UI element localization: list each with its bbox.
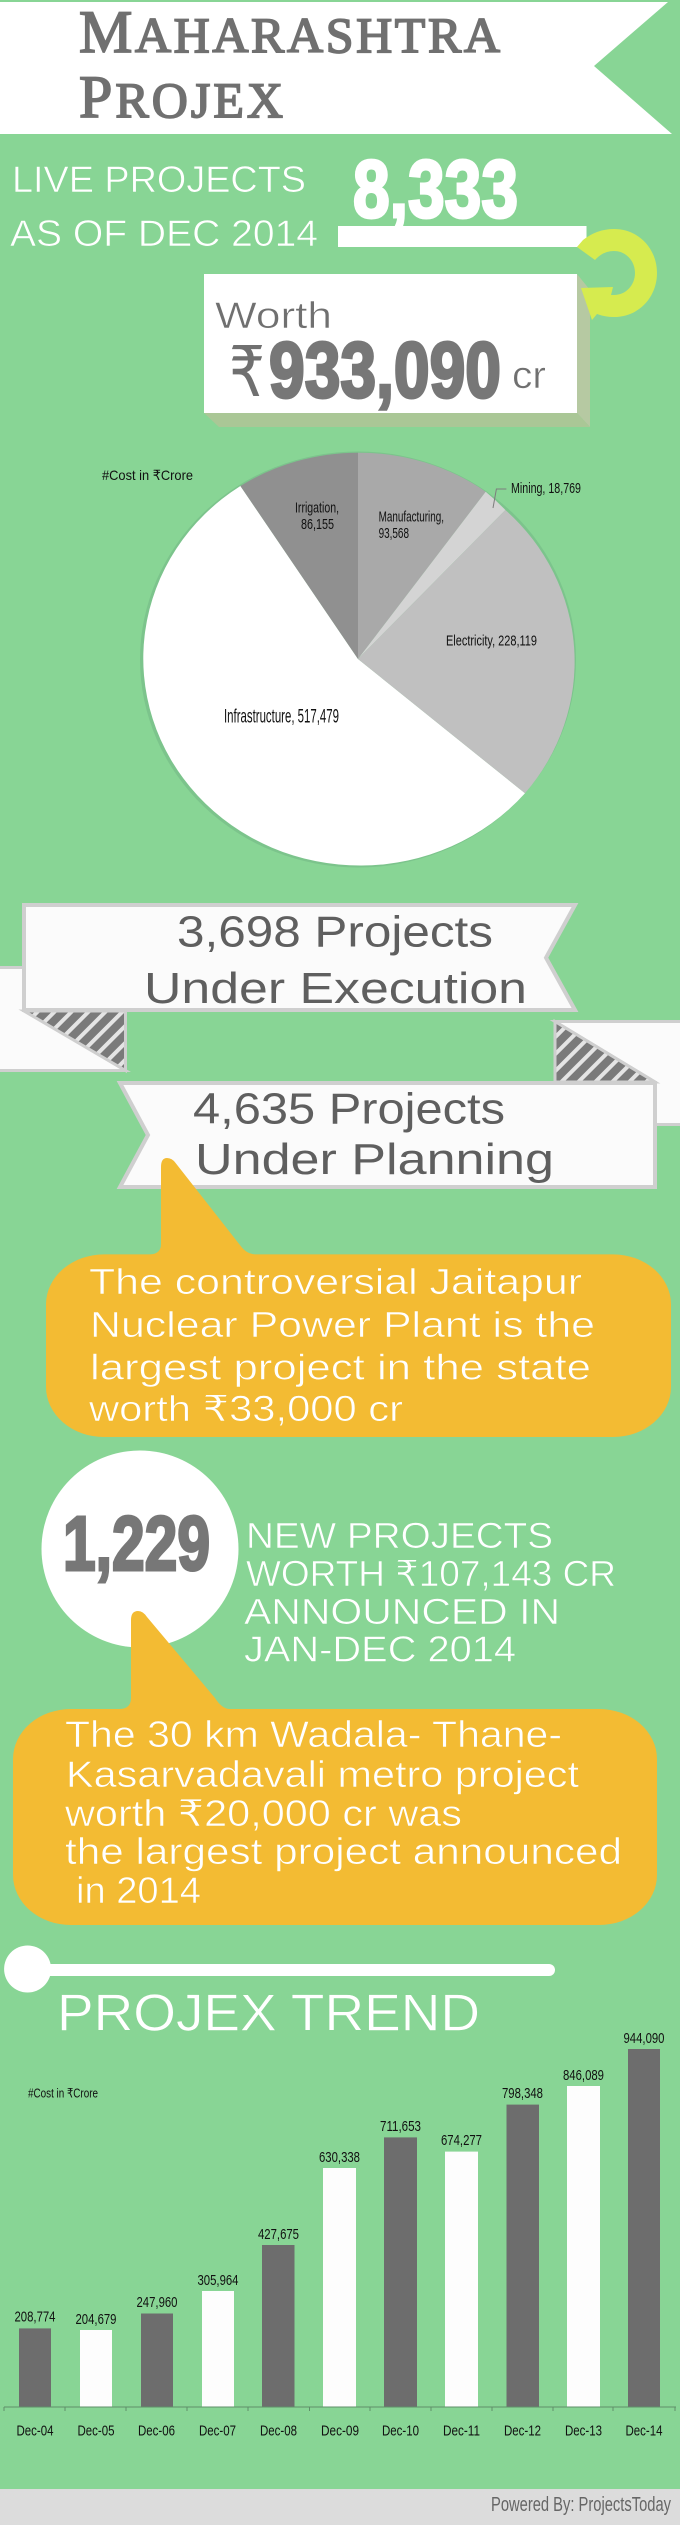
- pie chart unit note: #Cost in ₹Crore: [102, 467, 193, 483]
- category labels: Dec-07: [199, 2422, 236, 2440]
- callout text: largest project in the state: [90, 1346, 591, 1388]
- pie labels: Electricity, 228,119: [446, 633, 537, 650]
- callout text: [64, 1714, 622, 1911]
- live projects heading: AS OF DEC 2014: [10, 213, 318, 254]
- slice: electricity: [358, 510, 575, 793]
- category labels: Dec-14: [626, 2422, 662, 2440]
- callout text: The controversial Jaitapur: [89, 1261, 582, 1302]
- value labels: 798,348: [502, 2085, 543, 2102]
- footer: [0, 2489, 680, 2525]
- ribbon back fold right: [555, 1022, 680, 1124]
- category labels: Dec-11: [443, 2422, 480, 2440]
- callout text: The 30 km Wadala- Thane-: [65, 1714, 562, 1755]
- worth amount: ₹: [229, 333, 265, 411]
- category labels: Dec-08: [260, 2422, 297, 2440]
- live projects heading: LIVE PROJECTS: [12, 159, 306, 200]
- pie chart: [140, 452, 581, 868]
- value labels: 630,338: [319, 2149, 360, 2166]
- category labels: Dec-13: [565, 2422, 602, 2440]
- bar chart: [4, 2030, 676, 2440]
- value labels: 711,653: [380, 2118, 421, 2135]
- category labels: Dec-05: [78, 2422, 114, 2440]
- callout text: worth ₹33,000 cr: [88, 1388, 403, 1429]
- ribbon text: [144, 908, 527, 1013]
- callout text: the largest project announced: [65, 1831, 622, 1872]
- value labels: 944,090: [624, 2030, 664, 2047]
- ribbon text: Under Execution: [144, 964, 527, 1013]
- category labels: [16, 2422, 662, 2440]
- slice: irrigation: [240, 453, 358, 659]
- ribbon text: [193, 1084, 554, 1184]
- slice: infrastructure: [143, 486, 525, 866]
- worth label: Worth: [215, 295, 332, 336]
- bars: [19, 2049, 660, 2407]
- pie labels: 93,568: [379, 525, 409, 542]
- pie labels: Manufacturing,: [379, 509, 444, 526]
- new projects text: NEW PROJECTS: [246, 1515, 553, 1556]
- heading: projex trend: PROJEX TREND: [57, 1985, 480, 2043]
- worth panel: [204, 274, 590, 427]
- category labels: Dec-06: [138, 2422, 175, 2440]
- callout text: Kasarvadavali metro project: [66, 1754, 580, 1795]
- category labels: Dec-10: [382, 2422, 419, 2440]
- ribbon text: 3,698 Projects: [177, 908, 493, 957]
- new projects circle: [42, 1450, 238, 1648]
- new projects text: JAN-DEC 2014: [244, 1629, 516, 1670]
- ribbon: under planning: [120, 1022, 680, 1187]
- axis: [4, 2407, 676, 2411]
- pie labels: Infrastructure, 517,479: [224, 707, 339, 728]
- category labels: Dec-12: [504, 2422, 541, 2440]
- title: MAHARASHTRA: [79, 0, 500, 65]
- ribbon back fold left: [0, 968, 126, 1070]
- icon: curved arrow: [577, 229, 657, 320]
- worth amount: 933,090: [269, 325, 501, 414]
- value labels: [14, 2030, 664, 2328]
- chart unit note: #Cost in ₹Crore: [28, 2086, 98, 2100]
- value labels: 305,964: [198, 2272, 238, 2289]
- pie labels: [224, 480, 581, 728]
- pie labels: Mining, 18,769: [511, 480, 581, 497]
- new projects text: [244, 1515, 616, 1670]
- pie labels: 86,155: [301, 516, 334, 533]
- ribbon text: Under Planning: [195, 1135, 554, 1184]
- live projects number with bar: 8,333: [353, 144, 518, 235]
- title: PROJEX: [79, 64, 283, 130]
- new projects text: ANNOUNCED IN: [244, 1591, 560, 1632]
- title: [79, 0, 500, 130]
- callout text: [88, 1261, 595, 1429]
- new projects text: WORTH ₹107,143 CR: [246, 1553, 616, 1594]
- value labels: 204,679: [76, 2311, 116, 2328]
- callout: metro project: [13, 1611, 657, 1925]
- value labels: 427,675: [258, 2226, 299, 2243]
- callout: Jaitapur: [46, 1158, 671, 1437]
- category labels: Dec-09: [321, 2422, 359, 2440]
- slice: manufacturing: [358, 453, 486, 659]
- pie labels: Irrigation,: [295, 500, 339, 517]
- live projects heading: [10, 159, 318, 254]
- slice: mining: [358, 492, 505, 659]
- callout text: in 2014: [76, 1870, 201, 1911]
- callout text: worth ₹20,000 cr was: [64, 1793, 462, 1834]
- value labels: 247,960: [136, 2294, 178, 2311]
- callout text: Nuclear Power Plant is the: [90, 1304, 595, 1345]
- category labels: Dec-04: [16, 2422, 54, 2440]
- ribbon: under execution: [0, 905, 575, 1070]
- new projects circle: 1,229: [63, 1501, 210, 1587]
- value labels: 846,089: [563, 2067, 604, 2084]
- title banner: [0, 0, 672, 134]
- worth amount: cr: [512, 355, 546, 397]
- value labels: 208,774: [14, 2309, 56, 2326]
- trend heading slider: [4, 1946, 555, 1992]
- value labels: 674,277: [441, 2132, 482, 2149]
- ribbon text: 4,635 Projects: [193, 1084, 505, 1133]
